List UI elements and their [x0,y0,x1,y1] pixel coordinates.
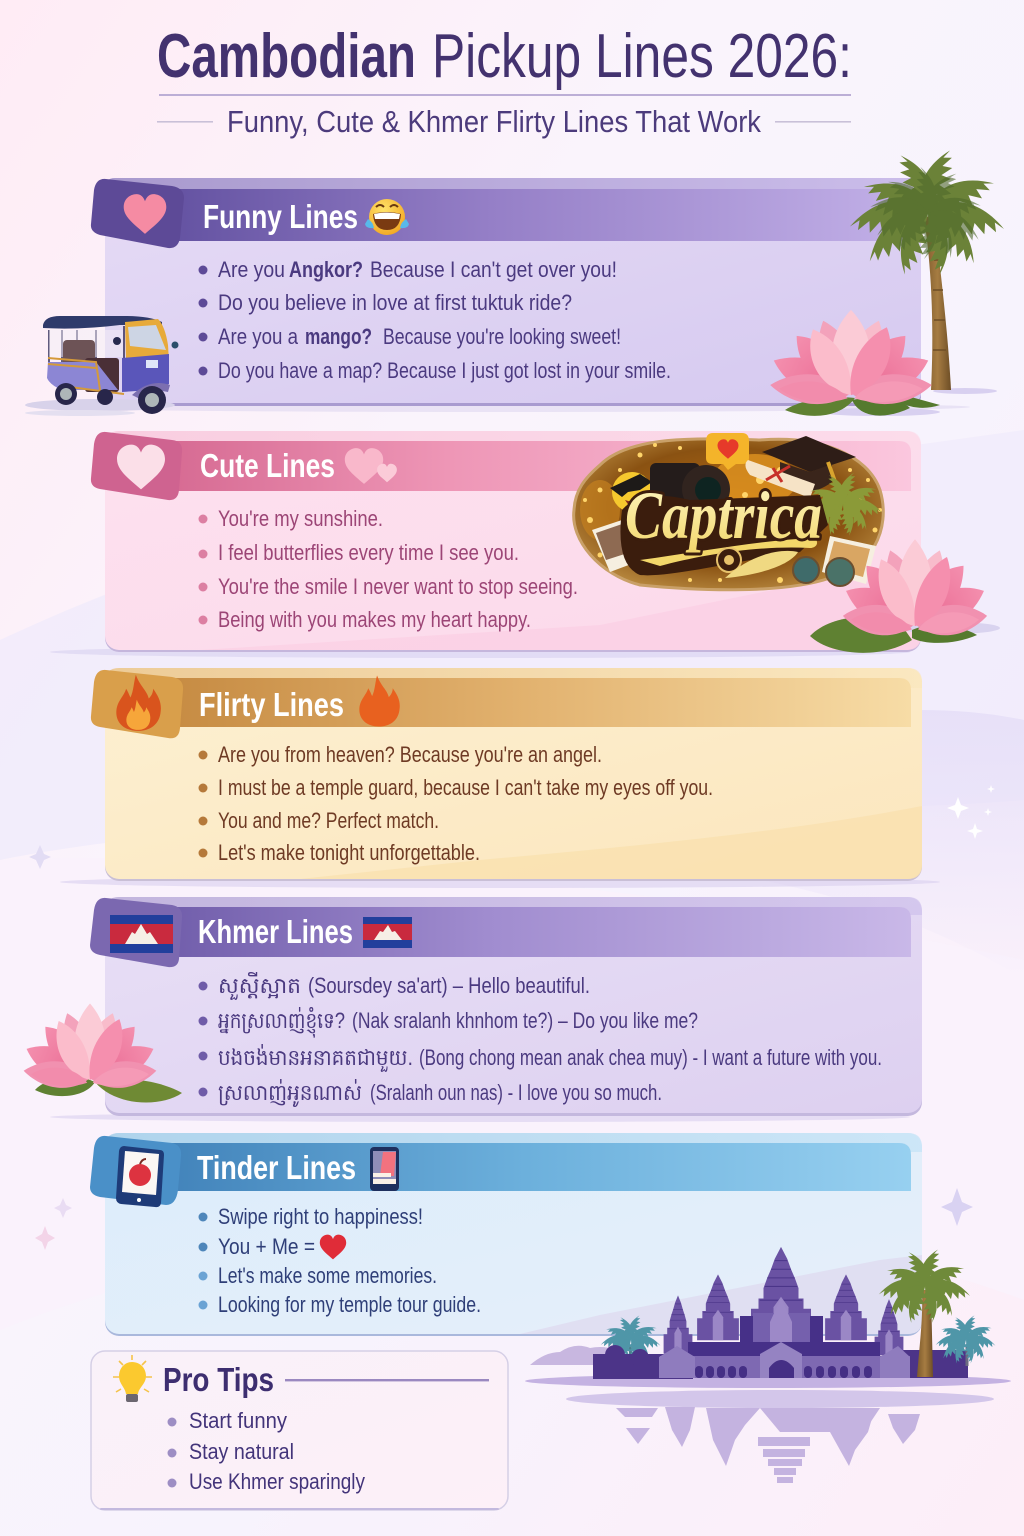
heading: Cute Lines [200,447,335,484]
list [168,1408,365,1494]
palm far right [966,1345,968,1366]
list [198,1204,481,1317]
reflection [616,1407,920,1483]
list: Start funny [189,1408,287,1433]
list: Angkor? [289,257,363,282]
illustration: lotus bottom left [21,1003,182,1103]
list: Being with you makes my heart happy. [218,607,531,632]
smiley [612,472,652,512]
panel: cute lines [91,431,921,652]
illustration: palm tree top right [849,146,1006,394]
illustration: captrica logo [574,433,883,590]
list: Because you're looking sweet! [383,324,621,349]
list: Do you have a map? Because I just got lost in your smile. [218,358,671,383]
panel: flirty lines [91,668,922,881]
list: You're the smile I never want to stop seeing. [218,574,578,599]
decorative sparkles [29,785,995,1250]
panel: tinder lines [90,1133,922,1336]
title: Cambodian [157,22,416,91]
tab with flame icon [91,670,183,738]
tab with heart icon [91,179,184,248]
list: Use Khmer sparingly [189,1469,365,1494]
tab with flag [90,898,182,967]
emoji: laughing [365,199,409,235]
logo wordmark: Captrica [625,477,822,553]
list: អ្នកស្រលាញ់ខ្ញុំទេ? [218,1007,345,1038]
list: សួស្តីស្អាត [218,972,301,1000]
illustration: lotus middle [810,539,1000,653]
list: Looking for my temple tour guide. [218,1292,481,1317]
icon: phone [370,1147,399,1191]
subtitle: Funny, Cute & Khmer Flirty Lines That Work [227,104,761,139]
list: Let's make some memories. [218,1263,437,1288]
list: Are you a [218,324,299,349]
panel: khmer lines [90,897,922,1116]
heading: Funny Lines [203,198,358,235]
list [198,742,713,865]
camera [650,463,700,501]
aperture [717,548,741,572]
heading: Khmer Lines [198,913,353,950]
photos [592,518,642,572]
list: Let's make tonight unforgettable. [218,840,480,865]
panel: funny lines [91,178,921,406]
towers [751,1247,811,1340]
bushes [530,1346,640,1365]
feather [725,551,798,578]
wheels [55,383,77,405]
title: Pickup Lines 2026: [432,22,852,91]
tab with phone icon [90,1136,181,1207]
cabin posts [49,326,124,375]
list: (Nak sralanh khnhom te?) – Do you like me? [352,1008,698,1033]
diploma [745,460,815,498]
small palm [812,510,828,545]
list: ស្រលាញ់អូនណាស់ [218,1079,362,1107]
list [198,506,578,632]
central gallery [740,1316,753,1342]
panel: pro tips [91,1351,508,1510]
heading: Tinder Lines [197,1149,356,1186]
seats [63,340,95,370]
canopy [43,316,162,329]
body [47,362,118,390]
list [198,972,882,1107]
illustration: lotus top [767,310,940,416]
logo backing [620,495,828,575]
icon: pink hearts [345,448,397,484]
list: I feel butterflies every time I see you. [218,540,519,565]
list: Because I can't get over you! [370,257,617,282]
list: I must be a temple guard, because I can't take my eyes off you. [218,775,713,800]
list: Stay natural [189,1439,294,1464]
list: (Sralanh oun nas) - I love you so much. [370,1080,662,1105]
list: You + Me = [218,1234,315,1259]
list: Swipe right to happiness! [218,1204,423,1229]
title [157,22,852,91]
heading: Flirty Lines [199,686,344,723]
water ellipse [525,1374,1011,1388]
list [198,257,671,383]
icon: red heart [320,1235,346,1259]
sunglasses [793,557,819,583]
palm left [630,1345,632,1375]
speech bubble heart [706,433,749,470]
icon: light bulb [113,1355,152,1402]
mirrors [113,337,121,345]
illustration: tuk-tuk [25,316,178,416]
arcade [660,1356,910,1378]
icon: flame [359,676,400,727]
mortarboard [762,436,856,472]
heading: Pro Tips [163,1361,274,1398]
roof [688,1342,880,1357]
list: Do you believe in love at first tuktuk ride? [218,290,572,315]
list: (Bong chong mean anak chea muy) - I want a future with you. [419,1045,882,1070]
tab with heart icon [91,432,182,500]
palm right [917,1290,933,1377]
list: បងចង់មានអនាគតជាមួយ. [218,1044,413,1072]
list: Are you [218,257,285,282]
icon: flag [363,917,412,948]
list: mango? [305,324,372,349]
list: Are you from heaven? Because you're an angel. [218,742,602,767]
title rule [159,94,851,96]
list: You and me? Perfect match. [218,808,439,833]
illustration: angkor wat temple and reflection [525,1247,1011,1483]
list: You're my sunshine. [218,506,383,531]
list: (Soursdey sa'art) – Hello beautiful. [308,973,590,998]
